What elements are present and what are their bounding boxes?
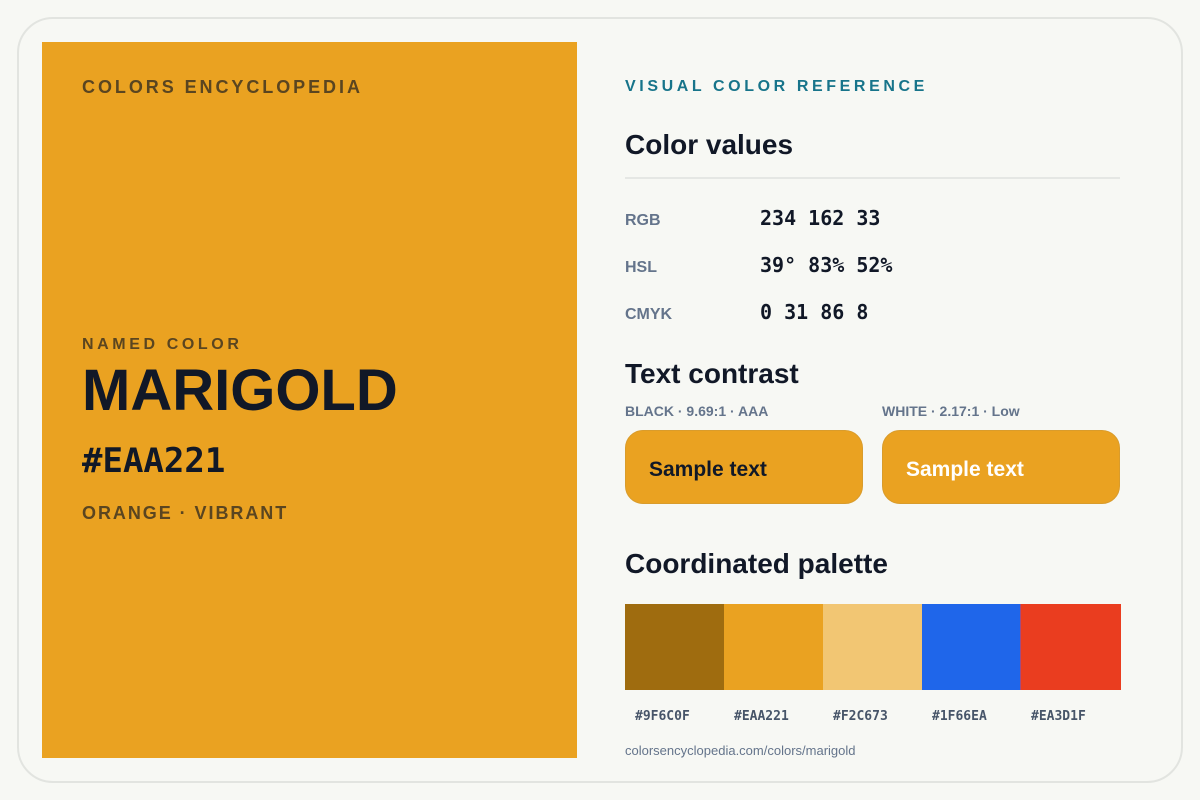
sample text: black: Sample text <box>649 458 767 481</box>
color category: ORANGE · VIBRANT <box>82 503 288 523</box>
swatch 3 <box>823 604 922 690</box>
contrast label: black: BLACK · 9.69:1 · AAA <box>625 403 768 419</box>
sample box: black text <box>625 430 863 504</box>
swatch hex 4: #1F66EA <box>932 709 987 724</box>
label: CMYK: CMYK <box>625 306 672 323</box>
contrast label: white: WHITE · 2.17:1 · Low <box>882 403 1020 419</box>
swatch 1 <box>625 604 724 690</box>
heading: text contrast: Text contrast <box>625 358 799 389</box>
label: RGB: RGB <box>625 212 661 229</box>
sample text: white: Sample text <box>906 458 1024 481</box>
swatch 5 <box>1021 604 1121 690</box>
value: RGB: 234 162 33 <box>760 206 880 230</box>
values divider <box>625 177 1120 179</box>
sample box: white text <box>882 430 1120 504</box>
panel: color hero <box>42 42 577 758</box>
swatch 2 <box>724 604 823 690</box>
swatch hex 2: #EAA221 <box>734 709 789 724</box>
value: HSL: 39° 83% 52% <box>760 253 892 277</box>
heading: coordinated palette: Coordinated palette <box>625 548 888 579</box>
swatch 4 <box>922 604 1020 690</box>
swatch hex 1: #9F6C0F <box>635 709 690 724</box>
named color label: NAMED COLOR <box>82 336 242 353</box>
hex code: #EAA221 <box>82 441 225 481</box>
color name: MARIGOLD <box>82 358 398 423</box>
section eyebrow: VISUAL COLOR REFERENCE <box>625 78 928 95</box>
source url: colorsencyclopedia.com/colors/marigold <box>625 743 856 758</box>
heading: color values: Color values <box>625 129 793 160</box>
swatch hex 5: #EA3D1F <box>1031 709 1086 724</box>
label: HSL: HSL <box>625 259 657 276</box>
brand label: COLORS ENCYCLOPEDIA <box>82 77 363 97</box>
value: CMYK: 0 31 86 8 <box>760 300 868 324</box>
palette swatches <box>625 604 1121 690</box>
swatch hex 3: #F2C673 <box>833 709 888 724</box>
